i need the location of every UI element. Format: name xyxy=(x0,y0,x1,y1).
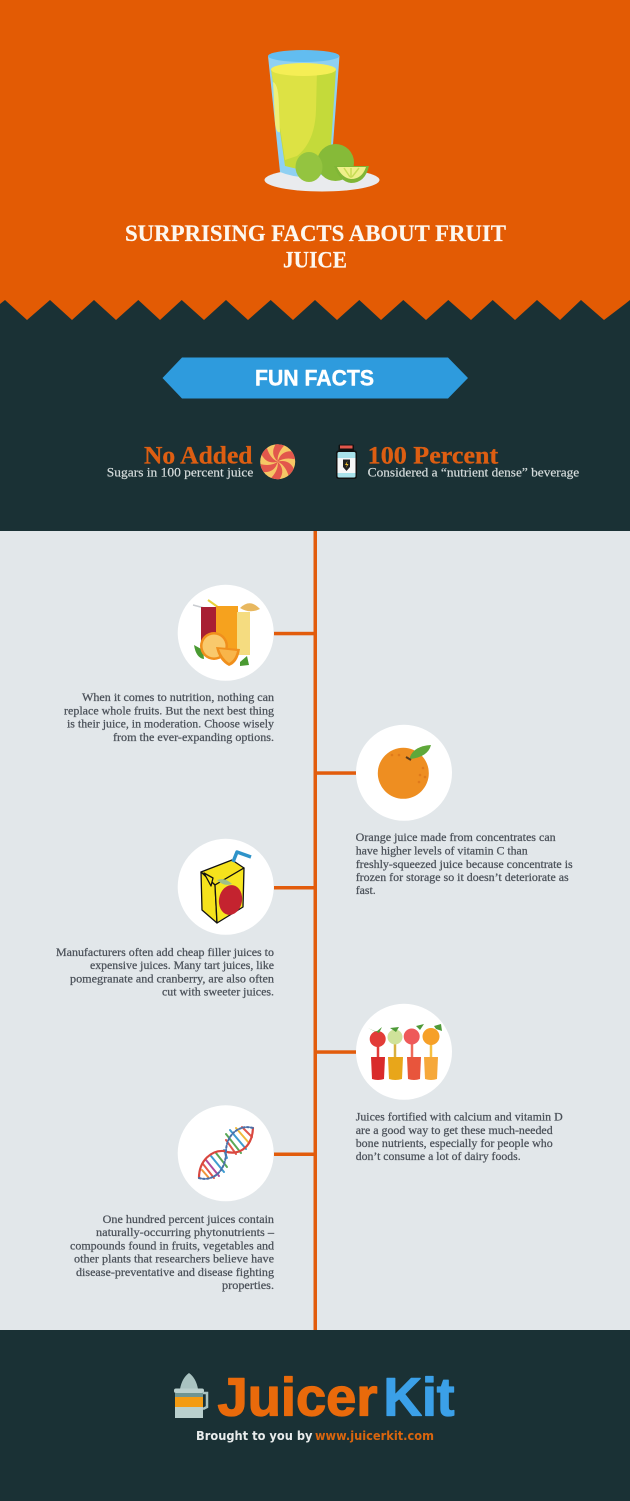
text: phytonutrients: disease-preventative and disease fighting xyxy=(76,1265,274,1279)
text: fortified juices: Juices fortified with calcium and vitamin D xyxy=(356,1110,563,1124)
text: filler juices: cut with sweeter juices. xyxy=(162,984,274,998)
icon: four fruit juices xyxy=(368,1024,442,1080)
text: concentrates: have higher levels of vitamin C than xyxy=(356,844,528,858)
text: phytonutrients: compounds found in fruits, vegetables and xyxy=(70,1238,274,1252)
fact: 100 percent xyxy=(336,442,579,480)
text: phytonutrients: One hundred percent juices contain xyxy=(103,1212,274,1226)
timeline line xyxy=(314,531,317,1330)
icon: DNA helix xyxy=(199,1127,253,1179)
text: filler juices: Manufacturers often add cheap filler juices to xyxy=(56,945,274,959)
text: filler juices xyxy=(56,945,274,998)
banner: fun facts xyxy=(162,358,468,398)
panel: orange header xyxy=(0,0,630,320)
text: concentrates: frozen for storage so it doesn’t deteriorate as xyxy=(356,870,569,884)
fact: no added sugars xyxy=(107,442,296,480)
item 2: orange and concentrate text xyxy=(317,725,573,897)
icon: bottle xyxy=(336,444,357,479)
text: filler juices: expensive juices. Many tart juices, like xyxy=(90,958,274,972)
text: phytonutrients: naturally-occurring phytonutrients – xyxy=(96,1225,275,1239)
text: fortified juices: are a good way to get these much-needed xyxy=(356,1123,553,1137)
icon: glass of juice with limes xyxy=(264,50,380,192)
footer: JuicerKit logo: Kit xyxy=(384,1368,455,1428)
title: SURPRISING FACTS ABOUT FRUIT xyxy=(125,221,506,246)
text: phytonutrients: properties. xyxy=(222,1278,274,1292)
text: concentrates: fast. xyxy=(356,883,376,897)
text: whole fruits: is their juice, in moderation. Choose wisely xyxy=(67,716,274,730)
icon: juicer xyxy=(174,1373,207,1418)
title: JUICE xyxy=(283,248,347,272)
fact: 100 percent: 100 Percent xyxy=(368,442,499,470)
fact: 100 percent: Considered a “nutrient dense” beverage xyxy=(368,464,579,480)
footer credit xyxy=(196,1428,434,1443)
footer: JuicerKit logo: Juicer xyxy=(218,1368,378,1428)
text: phytonutrients xyxy=(70,1212,275,1292)
icon: orange xyxy=(378,745,431,799)
text: concentrates: freshly-squeezed juice because concentrate is xyxy=(356,857,573,871)
item 4: fruit juices and fortified text xyxy=(317,1004,563,1163)
text: concentrates xyxy=(356,830,573,897)
footer credit: Brought to you by xyxy=(196,1428,312,1443)
title xyxy=(125,221,506,272)
text: whole fruits: from the ever-expanding options. xyxy=(113,730,274,744)
item 5: DNA and phytonutrient text xyxy=(70,1105,314,1292)
icon: juice box xyxy=(201,852,251,923)
item 3: juice box and filler text xyxy=(56,839,314,998)
icon: three juice glasses with orange xyxy=(193,600,260,666)
text: fortified juices xyxy=(356,1110,563,1163)
icon: candy swirl xyxy=(259,444,296,479)
text: fortified juices: bone nutrients, especially for people who xyxy=(356,1136,553,1150)
text: phytonutrients: other plants that researchers believe have xyxy=(74,1252,274,1266)
banner: fun facts: FUN FACTS xyxy=(255,366,374,390)
footer credit: www.juicerkit.com xyxy=(315,1428,434,1443)
text: fortified juices: don’t consume a lot of dairy foods. xyxy=(356,1149,521,1163)
text: concentrates: Orange juice made from concentrates can xyxy=(356,830,556,844)
fact: no added sugars: No Added xyxy=(144,442,253,470)
text: whole fruits: When it comes to nutrition, nothing can xyxy=(82,690,274,704)
text: filler juices: pomegranate and cranberry, are also often xyxy=(70,971,274,985)
text: whole fruits xyxy=(64,690,274,744)
footer: JuicerKit logo xyxy=(174,1368,455,1443)
text: whole fruits: replace whole fruits. But the next best thing xyxy=(64,703,274,717)
fact: no added sugars: Sugars in 100 percent juice xyxy=(107,464,254,480)
item 1: juice glasses and nutrition text xyxy=(64,585,314,744)
panel: timeline section xyxy=(0,531,630,1330)
